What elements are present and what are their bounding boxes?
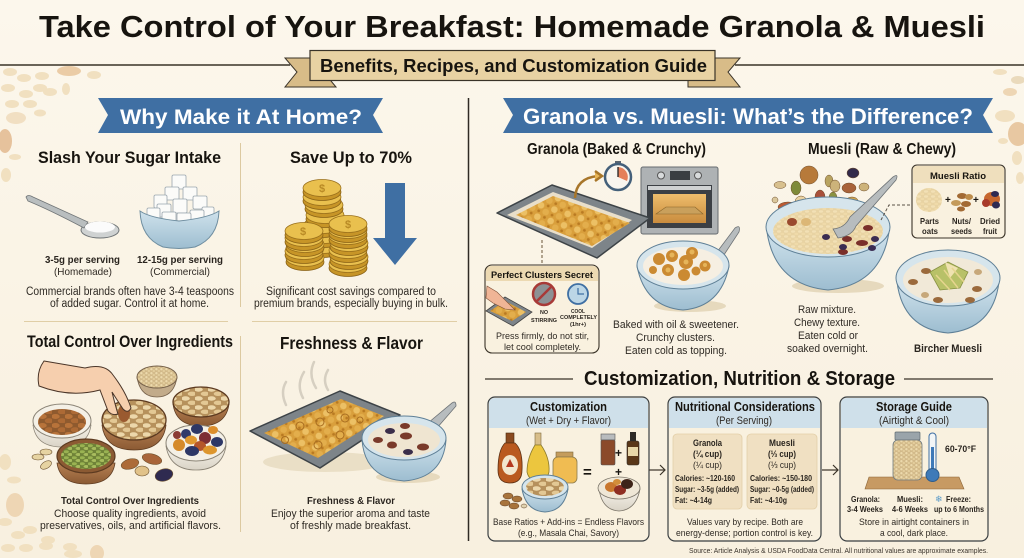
heading: savings: Save Up to 70%	[290, 148, 412, 167]
text: granola description: Crunchy clusters.	[636, 332, 715, 344]
text: freeze storage: up to 6 Months	[934, 504, 984, 514]
heading: storage: Storage Guide	[876, 400, 952, 414]
text: granola storage: 3-4 Weeks	[847, 504, 883, 514]
subtitle ribbon	[0, 50, 1024, 87]
icon: timer	[605, 161, 631, 190]
banner: granola vs muesli: Granola vs. Muesli: What’s the Difference?	[523, 104, 973, 129]
text: freeze storage	[934, 494, 984, 514]
text: plus signs: +	[945, 195, 951, 206]
text: storage note	[859, 517, 969, 539]
illustration: flying nuts and fruit	[772, 166, 869, 212]
text: nuts label	[951, 216, 972, 236]
text: storage note: a cool, dark place.	[880, 528, 948, 539]
text: savings description: Significant cost savings compared to	[266, 286, 436, 298]
icon: spoon of sugar	[26, 196, 119, 238]
card: granola nutrition	[673, 434, 742, 509]
icon: coin stacks: $	[345, 219, 351, 231]
text: fruit label: Dried	[980, 216, 1000, 226]
main divider	[468, 98, 470, 541]
card: granola nutrition: Fat: ~4-14g	[675, 496, 712, 505]
illustration: baking tray	[497, 185, 650, 258]
text: ingredients description	[40, 495, 221, 532]
heading: freshness: Freshness & Flavor	[280, 333, 423, 353]
text: granola storage	[847, 494, 883, 514]
source note: Source: Article Analysis & USDA FoodData Central. All nutritional values are approximate examples.	[689, 546, 988, 555]
icon: add-ins bowl	[598, 477, 640, 511]
illustration: granola tray	[250, 391, 400, 472]
card: muesli nutrition: (⅓ cup)	[768, 460, 796, 470]
panel: muesli	[766, 141, 1005, 355]
decoration: bottom-left grains	[0, 454, 104, 558]
text: fruit label	[980, 216, 1000, 236]
title: Take Control of Your Breakfast: Homemade Granola & Muesli	[39, 9, 985, 44]
icon: loose nuts	[500, 493, 527, 509]
decoration: top-left grains	[0, 66, 101, 182]
text: oats label: Parts	[920, 216, 939, 226]
callout: perfect clusters secret	[485, 265, 599, 353]
card: granola nutrition: (¼ cup)	[693, 460, 722, 470]
icon: dried fruit	[982, 191, 1000, 208]
text: homemade amount	[45, 254, 120, 278]
card: muesli nutrition: (⅓ cup)	[768, 449, 796, 459]
heading: muesli: Muesli (Raw & Chewy)	[808, 141, 956, 158]
card: granola nutrition: Sugar: ~3-5g (added)	[675, 485, 739, 494]
card: muesli nutrition: Sugar: ~0-5g (added)	[750, 485, 814, 494]
icon: extract bottle	[627, 432, 639, 465]
text: nutrition note	[676, 517, 813, 539]
text: plus signs: +	[973, 195, 979, 206]
icon: cool completely: (1hr+)	[570, 322, 586, 328]
text: savings description: premium brands, especially buying in bulk.	[254, 298, 448, 310]
text: granola storage: Granola:	[851, 494, 880, 504]
card: granola nutrition: Calories: ~120-160	[675, 474, 736, 483]
illustration: large muesli bowl	[766, 176, 897, 293]
icon: plus signs: +	[615, 446, 622, 460]
icon: bowl of sugar cubes	[140, 175, 219, 248]
icon: spice shaker	[601, 434, 615, 465]
text: homemade amount: 3-5g per serving	[45, 254, 120, 266]
text: ingredients description: Choose quality ingredients, avoid	[54, 508, 206, 520]
text: sugar description: of added sugar. Control it at home.	[50, 298, 209, 310]
text: muesli description: Raw mixture.	[798, 304, 856, 316]
text: customization note	[493, 517, 644, 539]
icon: coin stacks: $	[319, 183, 325, 195]
heading: customization, nutrition & storage: Customization, Nutrition & Storage	[584, 367, 895, 390]
text: clusters tip: let cool completely.	[504, 342, 581, 353]
icon: oven	[641, 167, 718, 234]
icon: cool completely	[560, 284, 597, 328]
panel: granola	[485, 141, 740, 357]
icon: nuts	[951, 193, 973, 212]
decoration: top-right grains	[993, 69, 1024, 184]
text: freeze storage: ❄	[935, 495, 943, 505]
illustration: hand	[38, 361, 131, 415]
panel: sugar	[26, 148, 234, 310]
text: muesli storage: 4-6 Weeks	[892, 504, 928, 514]
heading: customization	[526, 400, 611, 427]
panel: nutrition	[668, 397, 821, 541]
icon: no stirring: NO	[540, 310, 549, 316]
icon: shelf	[865, 477, 964, 489]
text: oats label	[920, 216, 939, 236]
card: muesli nutrition: Fat: ~4-10g	[750, 496, 787, 505]
icon: oats	[916, 188, 942, 212]
text: oats label: oats	[922, 226, 938, 236]
text: muesli description	[787, 304, 868, 355]
icon: plus signs	[615, 446, 622, 479]
text: bircher label: Bircher Muesli	[914, 343, 982, 355]
text: fruit label: fruit	[983, 226, 997, 236]
text: muesli description: soaked overnight.	[787, 343, 868, 355]
text: sugar description	[26, 286, 234, 310]
text: temperature: 60-70°F	[945, 444, 976, 455]
text: nutrition note: Values vary by recipe. Both are	[687, 517, 803, 528]
card: granola nutrition: (¼ cup)	[693, 449, 722, 459]
text: freshness description: of freshly made breakfast.	[290, 520, 411, 532]
text: clusters tip: Press firmly, do not stir,	[496, 331, 589, 342]
text: ingredients description: Total Control Over Ingredients	[61, 495, 199, 507]
illustration: bircher muesli bowl	[896, 250, 1000, 333]
text: muesli storage	[892, 494, 928, 514]
heading: customization: (Wet + Dry + Flavor)	[526, 415, 611, 427]
text: customization note: Base Ratios + Add-ins = Endless Flavors	[493, 517, 644, 528]
arrow: nutrition to storage	[822, 465, 838, 475]
icon: equals sign: =	[583, 464, 592, 481]
illustration: ingredient bowls	[32, 366, 229, 484]
panel: ingredients	[27, 333, 233, 532]
callout: muesli ratio: Muesli Ratio	[930, 171, 986, 182]
arrow: customization to nutrition	[649, 465, 665, 475]
callout: muesli ratio	[912, 165, 1005, 238]
panel: customization	[488, 397, 649, 541]
card: muesli nutrition: Muesli	[769, 438, 795, 448]
icon: jar	[893, 432, 922, 480]
text: customization note: (e.g., Masala Chai, Savory)	[518, 528, 619, 539]
icon: down arrow	[373, 183, 417, 265]
panel: savings	[254, 148, 448, 310]
icon: maple syrup bottle	[498, 433, 522, 483]
heading: customization: Customization	[530, 400, 607, 414]
text: sugar description: Commercial brands often have 3-4 teaspoons	[26, 286, 234, 298]
icon: honey jar	[553, 452, 577, 483]
icon: no stirring	[531, 283, 557, 324]
text: granola description: Baked with oil & sweetener.	[613, 319, 739, 331]
text: freshness description: Enjoy the superior aroma and taste	[271, 508, 430, 520]
text: nutrition note: energy-dense; portion control is key.	[676, 528, 813, 539]
banner: why make it at home	[98, 98, 383, 133]
icon: base bowl	[522, 475, 568, 512]
card: muesli nutrition: Calories: ~150-180	[750, 474, 813, 483]
text: commercial amount: 12-15g per serving	[137, 254, 223, 266]
connector: dotted line	[541, 240, 543, 264]
text: commercial amount	[137, 254, 223, 278]
text: storage note: Store in airtight containers in	[859, 517, 969, 528]
text: muesli storage: Muesli:	[897, 494, 923, 504]
text: granola description: Eaten cold as topping.	[625, 345, 727, 357]
subtitle ribbon: Benefits, Recipes, and Customization Guide	[320, 55, 707, 76]
heading: nutrition: (Per Serving)	[716, 415, 772, 427]
text: clusters tip	[496, 331, 589, 353]
text: homemade amount: (Homemade)	[54, 266, 112, 278]
icon: cool completely: COOL	[571, 309, 586, 315]
connector: dashed line	[881, 205, 911, 220]
panel: storage	[840, 397, 988, 541]
text: freshness description: Freshness & Flavor	[307, 495, 395, 507]
heading: ingredients: Total Control Over Ingredients	[27, 333, 233, 351]
text: nuts label: seeds	[951, 226, 972, 236]
heading: storage	[876, 400, 952, 427]
illustration: muesli bowl with spoon	[362, 402, 456, 483]
text: savings description	[254, 286, 448, 310]
icon: oil bottle	[527, 433, 549, 481]
text: plus signs	[945, 195, 979, 206]
card: granola nutrition: Granola	[693, 438, 723, 448]
text: freshness description	[271, 495, 430, 532]
text: nuts label: Nuts/	[952, 216, 972, 226]
card: muesli nutrition	[747, 434, 817, 509]
banner: why make it at home: Why Make it At Home?	[120, 106, 362, 129]
text: muesli description: Eaten cold or	[798, 330, 858, 342]
heading: sugar: Slash Your Sugar Intake	[38, 148, 221, 167]
heading: storage: (Airtight & Cool)	[879, 415, 949, 427]
icon: coin stacks	[285, 180, 368, 276]
icon: steam	[283, 362, 328, 405]
icon: cool completely: COMPLETELY	[560, 315, 597, 321]
heading: nutrition: Nutritional Considerations	[675, 400, 815, 414]
heading: nutrition	[675, 400, 815, 427]
panel: freshness	[250, 333, 456, 532]
icon: thermometer	[926, 433, 939, 482]
icon: pressing hand	[486, 286, 532, 326]
icon: coin stacks: $	[300, 226, 306, 238]
heading: granola: Granola (Baked & Crunchy)	[527, 141, 706, 158]
text: ingredients description: preservatives, oils, and artificial flavors.	[40, 520, 221, 532]
icon: plus signs: +	[615, 465, 622, 479]
text: muesli description: Chewy texture.	[794, 317, 860, 329]
text: freeze storage: Freeze:	[946, 494, 971, 504]
icon: curved arrow	[575, 171, 602, 198]
illustration: cereal bowl	[637, 227, 740, 312]
icon: no stirring: STIRRING	[531, 318, 557, 324]
text: granola description	[613, 319, 739, 357]
text: commercial amount: (Commercial)	[150, 266, 210, 278]
banner: granola vs muesli	[503, 98, 993, 133]
callout: perfect clusters secret: Perfect Clusters Secret	[491, 270, 594, 281]
